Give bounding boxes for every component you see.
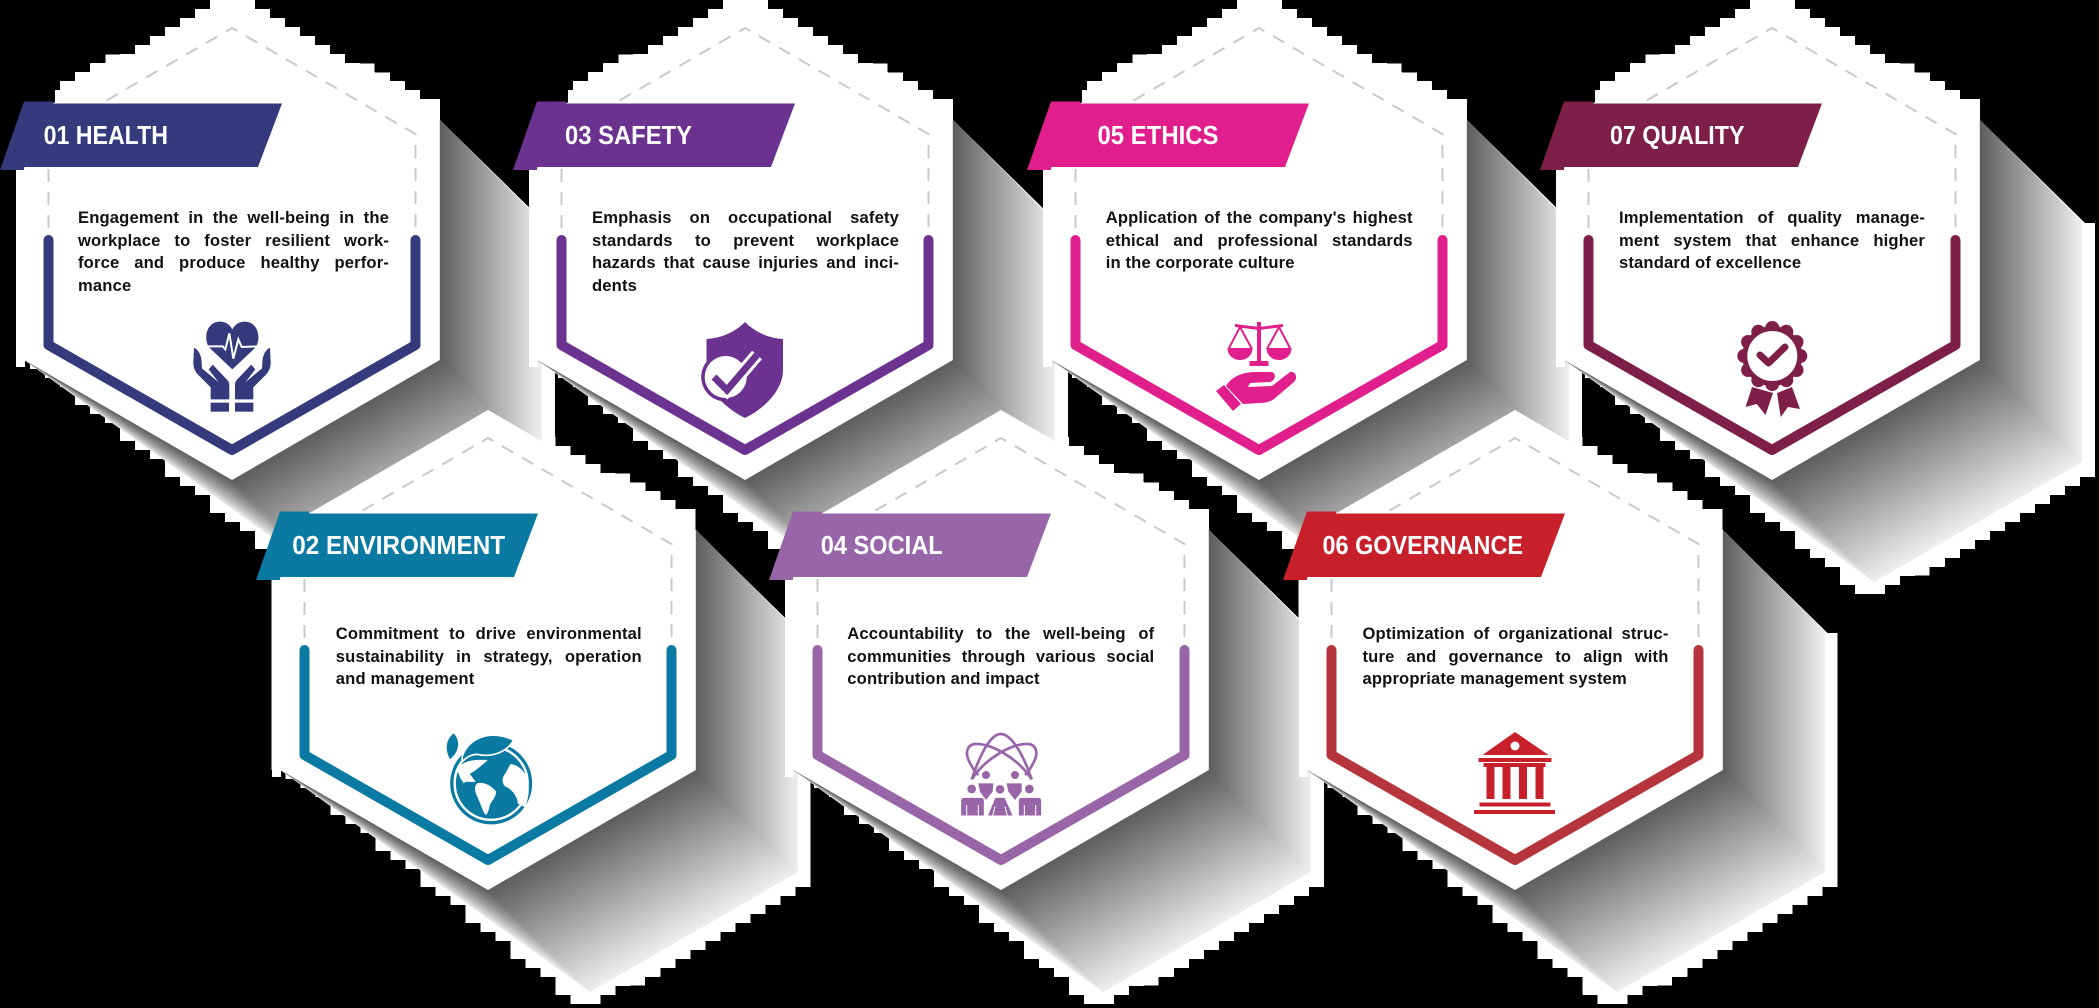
tag: 06 governance [1282, 512, 1564, 580]
description: quality: standard of excellence [1619, 253, 1801, 272]
tag: 07 quality: 07 QUALITY [1610, 120, 1744, 150]
panel: 02 Environment [256, 410, 798, 992]
icon: scales on open hand [1216, 322, 1296, 411]
description: social: contribution and impact [847, 669, 1040, 688]
tag: 03 safety: 03 SAFETY [565, 120, 692, 150]
description: governance: ture and governance to align with [1362, 647, 1668, 666]
tag: 01 health: 01 HEALTH [44, 120, 168, 150]
panel: 01 Health [0, 27, 542, 536]
description: safety: hazards that cause injuries and inci- [592, 253, 899, 272]
icon: award rosette with check [1737, 321, 1807, 417]
description: ethics: Application of the company's highest [1106, 208, 1413, 227]
panel: 07 Quality [1540, 27, 2082, 582]
chevron border: quality [1588, 240, 1956, 450]
tag: 05 ethics: 05 ETHICS [1098, 120, 1218, 150]
description: social [847, 624, 1154, 688]
tag: 01 health [0, 102, 282, 170]
chevron border: health [48, 240, 416, 450]
description: ethics [1106, 208, 1413, 272]
tag: 04 social: 04 SOCIAL [821, 530, 943, 560]
description: health [78, 208, 389, 295]
tag: 03 safety [513, 102, 795, 170]
panel: 05 Ethics [1027, 27, 1569, 536]
description: health: Engagement in the well-being in the [78, 208, 389, 227]
description: health: force and produce healthy perfor- [78, 253, 389, 272]
icon: community under atom orbits [961, 734, 1042, 816]
tag: 05 ethics [1027, 102, 1309, 170]
tag: 02 environment [256, 512, 538, 580]
description: safety: standards to prevent workplace [592, 231, 899, 250]
icon: heart in caring hands [193, 322, 271, 412]
icon: classical government building [1474, 732, 1554, 814]
description: environment: and management [336, 669, 474, 688]
description: environment: sustainability in strategy, operation [336, 647, 642, 666]
description: quality: ment system that enhance higher [1619, 231, 1925, 250]
tag: 04 social [769, 512, 1051, 580]
description: safety [592, 208, 899, 295]
icon: shield with check [701, 322, 783, 418]
description: health: workplace to foster resilient work- [78, 231, 389, 250]
description: health: mance [78, 276, 131, 295]
chevron border: ethics [1076, 240, 1442, 450]
description: environment [336, 624, 642, 688]
description: ethics: ethical and professional standards [1106, 231, 1413, 250]
chevron border: environment [304, 650, 671, 860]
description: governance [1362, 624, 1668, 688]
description: quality [1619, 208, 1925, 272]
icon: globe with leaves [446, 733, 530, 823]
chevron border: social [818, 650, 1184, 860]
description: environment: Commitment to drive environmental [336, 624, 642, 643]
description: safety: Emphasis on occupational safety [592, 208, 899, 227]
description: quality: Implementation of quality manage- [1619, 208, 1925, 227]
description: ethics: in the corporate culture [1106, 253, 1295, 272]
panel: 06 Governance [1283, 410, 1825, 992]
tag: 06 governance: 06 GOVERNANCE [1322, 530, 1522, 560]
chevron border: safety [562, 240, 928, 450]
tag: 02 environment: 02 ENVIRONMENT [292, 530, 505, 560]
chevron border: governance [1331, 650, 1698, 860]
panel: 04 Social [769, 410, 1311, 992]
description: safety: dents [592, 276, 637, 295]
tag: 07 quality [1540, 102, 1822, 170]
description: governance: appropriate management system [1362, 669, 1627, 688]
description: social: Accountability to the well-being of [847, 624, 1154, 643]
description: governance: Optimization of organizational struc- [1362, 624, 1668, 643]
description: social: communities through various social [847, 647, 1154, 666]
panel: 03 Safety [513, 27, 1055, 536]
